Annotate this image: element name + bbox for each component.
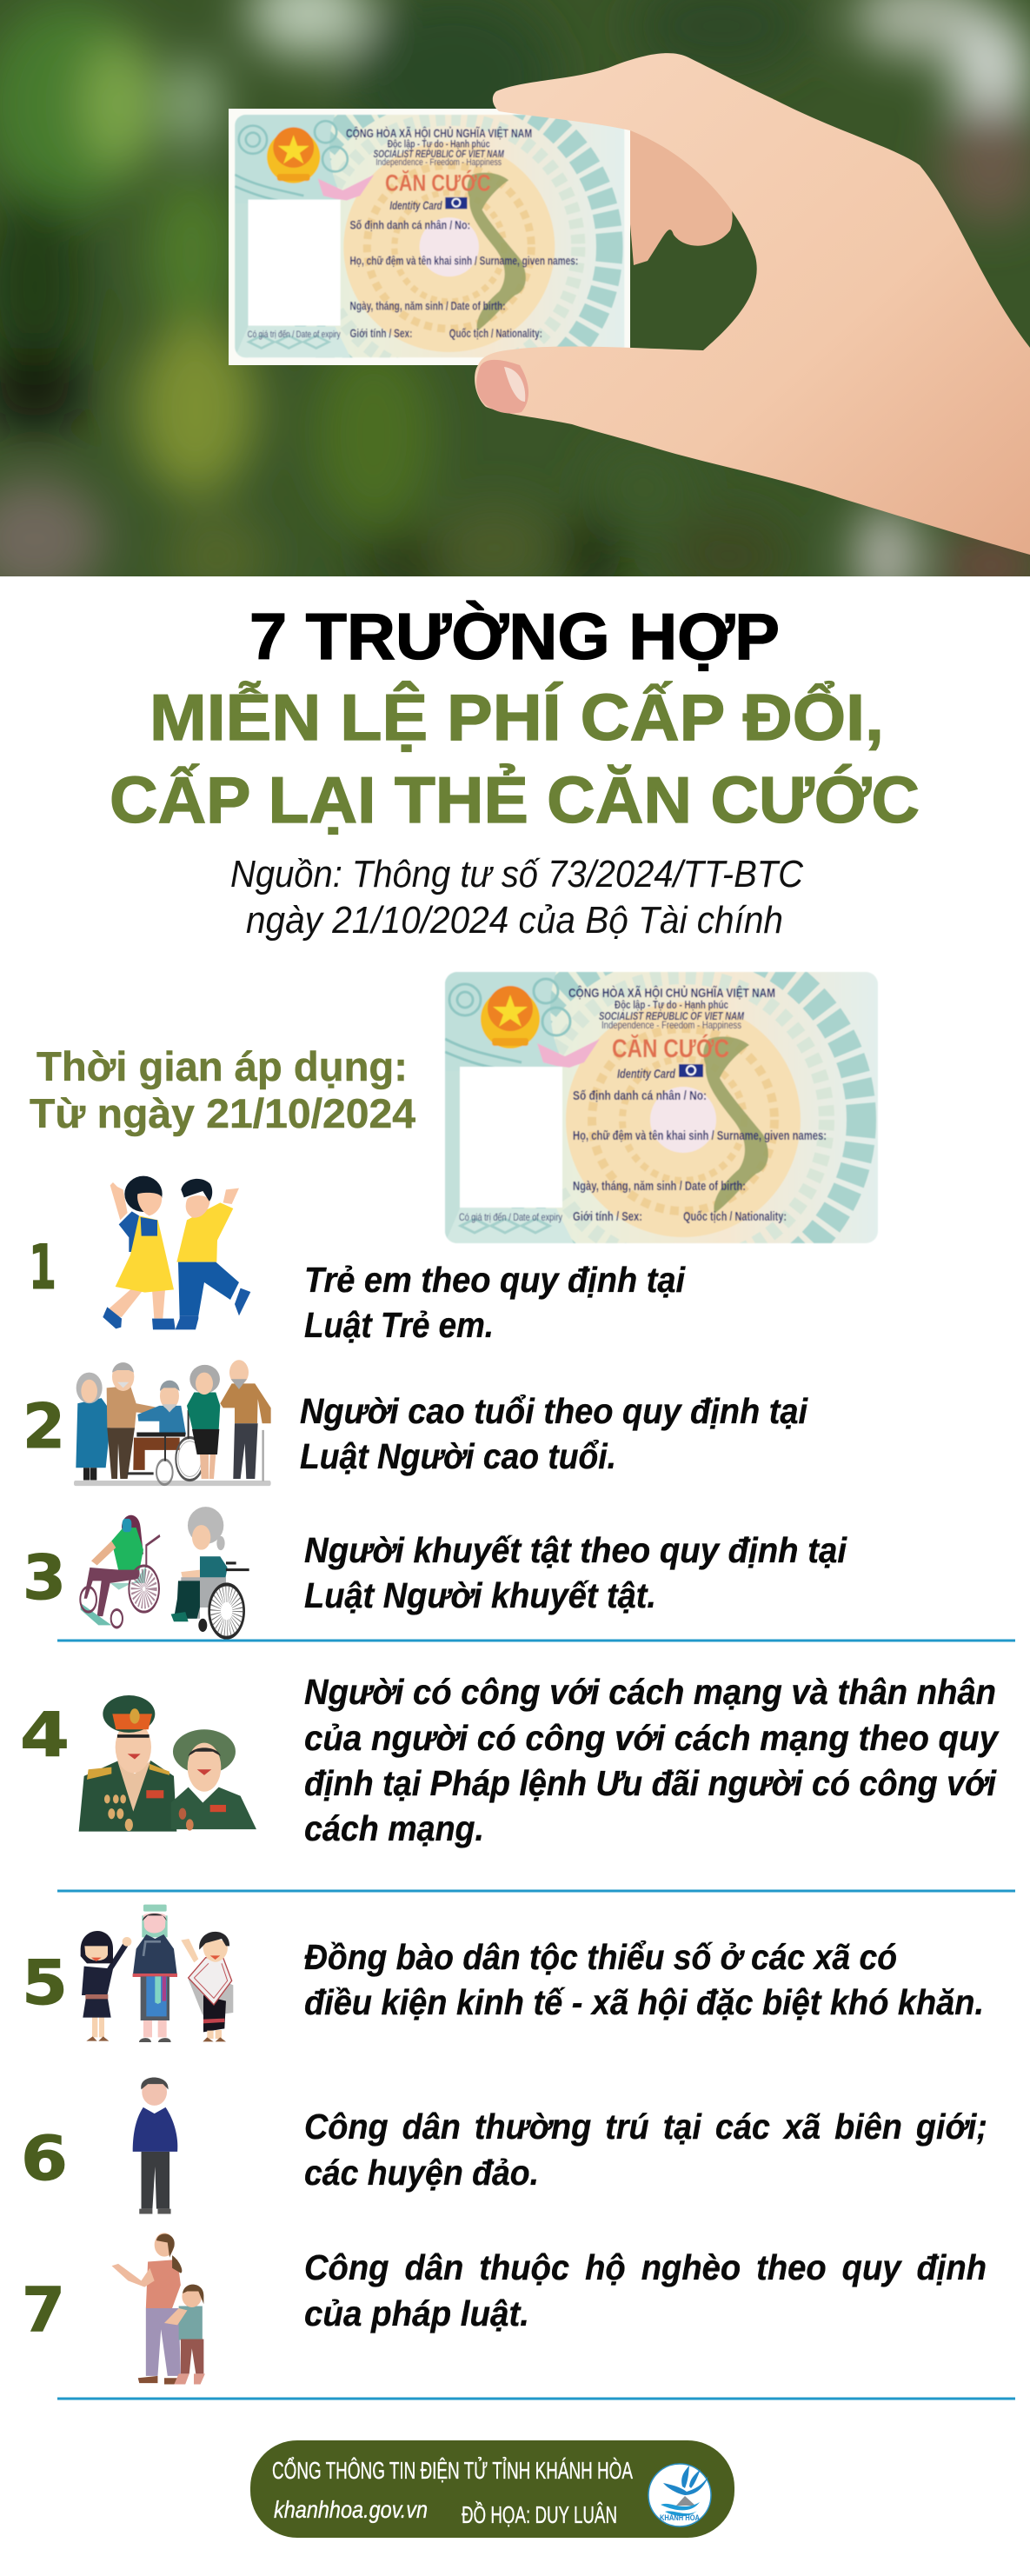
- fingers behind card: [630, 130, 733, 265]
- hero photo: hand holding ID card: Số định danh cá nhân / No:: [349, 219, 470, 232]
- item 4 text: cách mạng.: [304, 1808, 484, 1848]
- item 2 text: [300, 1391, 808, 1476]
- item 4 text: Người có công với cách mạng và thân nhân: [304, 1672, 996, 1712]
- title: CẤP LẠI THẺ CĂN CƯỚC: [110, 763, 920, 836]
- hero photo: hand holding ID card: Giới tính / Sex:: [349, 327, 412, 340]
- title: MIỄN LỆ PHÍ CẤP ĐỔI,: [150, 681, 884, 754]
- item 6 text: [304, 2107, 987, 2193]
- icon: veterans: [79, 1695, 256, 1832]
- footer badge: khanhhoa.gov.vn: [274, 2496, 428, 2523]
- hero photo: hand holding ID card: CĂN CƯỚC: [385, 170, 491, 196]
- ID card sample: CĂN CƯỚC: [612, 1034, 729, 1063]
- item 4 text: [304, 1672, 1000, 1848]
- hero photo: hand holding ID card: [0, 0, 1030, 609]
- item 7 number: 7: [22, 2274, 65, 2346]
- item 4 text: của người có công với cách mạng theo quy: [304, 1718, 1000, 1758]
- effective date: Thời gian áp dụng:: [37, 1043, 408, 1089]
- hero photo: hand holding ID card: Có giá trị đến / Date of expiry: [248, 329, 341, 340]
- item 1 number: 1: [29, 1232, 56, 1303]
- ID card sample: Họ, chữ đệm và tên khai sinh / Surname, given names:: [573, 1128, 827, 1143]
- ID card sample: CỘNG HÒA XÃ HỘI CHỦ NGHĨA VIỆT NAM: [568, 985, 775, 1001]
- item 5 text: Đồng bào dân tộc thiểu số ở các xã có: [304, 1937, 897, 1977]
- hand and thumb: [475, 53, 1030, 555]
- blurred green background: [0, 0, 1030, 609]
- ID card sample: Quốc tịch / Nationality:: [683, 1209, 787, 1224]
- item 1 text: Luật Trẻ em.: [304, 1305, 494, 1345]
- icon: elderly group: [74, 1360, 271, 1486]
- item 6 number: 6: [21, 2123, 68, 2194]
- ID card sample: Ngày, tháng, năm sinh / Date of birth:: [573, 1179, 746, 1194]
- ID card sample: Có giá trị đến / Date of expiry: [459, 1211, 562, 1223]
- ID card in hand: [229, 109, 630, 365]
- hero photo: hand holding ID card: Họ, chữ đệm và tên khai sinh / Surname, given names:: [349, 255, 578, 268]
- item 5 number: 5: [22, 1947, 68, 2019]
- footer badge: ĐỒ HỌA: DUY LUÂN: [462, 2501, 617, 2528]
- ID card sample: [444, 972, 878, 1243]
- ID card sample: SOCIALIST REPUBLIC OF VIET NAM: [599, 1009, 745, 1022]
- hero photo: hand holding ID card: SOCIALIST REPUBLIC OF VIET NAM: [373, 149, 504, 160]
- effective date: [30, 1043, 415, 1136]
- item 6 text: Công dân thường trú tại các xã biên giới;: [304, 2107, 987, 2147]
- source note: Nguồn: Thông tư số 73/2024/TT-BTC: [230, 853, 804, 895]
- item 4 number: 4: [20, 1700, 70, 1771]
- hero photo: hand holding ID card: Độc lập - Tự do - Hạnh phúc: [388, 139, 490, 150]
- icon: Khanh Hoa logo: KHÁNH HÒA: [660, 2513, 700, 2522]
- item 7 text: [304, 2247, 987, 2333]
- hero photo: hand holding ID card: Independence - Freedom - Happiness: [375, 157, 502, 168]
- icon: people in wheelchairs: [80, 1507, 249, 1638]
- effective date: Từ ngày 21/10/2024: [30, 1090, 415, 1136]
- item 7 text: của pháp luật.: [304, 2293, 529, 2333]
- footer badge: [250, 2440, 734, 2538]
- item 1 text: Trẻ em theo quy định tại: [304, 1260, 686, 1300]
- item 6 text: các huyện đảo.: [304, 2153, 539, 2193]
- item 3 number: 3: [23, 1542, 66, 1614]
- icon: ethnic minority people: [81, 1905, 233, 2042]
- ID card sample: Independence - Freedom - Happiness: [601, 1019, 741, 1031]
- icon: Khanh Hoa logo: [648, 2464, 711, 2526]
- hero photo: hand holding ID card: CỘNG HÒA XÃ HỘI CHỦ NGHĨA VIỆT NAM: [346, 127, 532, 140]
- ID card sample: Số định danh cá nhân / No:: [573, 1088, 707, 1103]
- item 1 text: [304, 1260, 686, 1345]
- title: 7 TRƯỜNG HỢP: [249, 600, 780, 673]
- item 3 text: Người khuyết tật theo quy định tại: [304, 1530, 847, 1570]
- icon: two children: [103, 1176, 250, 1329]
- icon: citizen: [133, 2078, 177, 2213]
- ID card sample: Identity Card: [617, 1067, 676, 1082]
- item 3 text: [304, 1530, 847, 1615]
- item 5 text: [304, 1937, 984, 2022]
- hero photo: hand holding ID card: Quốc tịch / Nationality:: [449, 327, 542, 340]
- ID card sample: Độc lập - Tự do - Hạnh phúc: [615, 998, 728, 1011]
- ID card sample: Giới tính / Sex:: [573, 1209, 642, 1224]
- title: [110, 600, 920, 836]
- item 2 number: 2: [23, 1391, 65, 1462]
- item 3 text: Luật Người khuyết tật.: [304, 1575, 656, 1615]
- source note: [230, 853, 804, 942]
- source note: ngày 21/10/2024 của Bộ Tài chính: [246, 899, 783, 942]
- item 7 text: Công dân thuộc hộ nghèo theo quy định: [304, 2247, 987, 2287]
- footer badge: CỔNG THÔNG TIN ĐIỆN TỬ TỈNH KHÁNH HÒA: [272, 2456, 633, 2484]
- item 5 text: điều kiện kinh tế - xã hội đặc biệt khó khăn.: [304, 1982, 984, 2022]
- hero photo: hand holding ID card: Ngày, tháng, năm sinh / Date of birth:: [349, 300, 506, 313]
- icon: mother and daughter: [112, 2233, 205, 2385]
- item 2 text: Luật Người cao tuổi.: [300, 1436, 616, 1476]
- hero photo: hand holding ID card: Identity Card: [389, 199, 442, 212]
- item 2 text: Người cao tuổi theo quy định tại: [300, 1391, 808, 1431]
